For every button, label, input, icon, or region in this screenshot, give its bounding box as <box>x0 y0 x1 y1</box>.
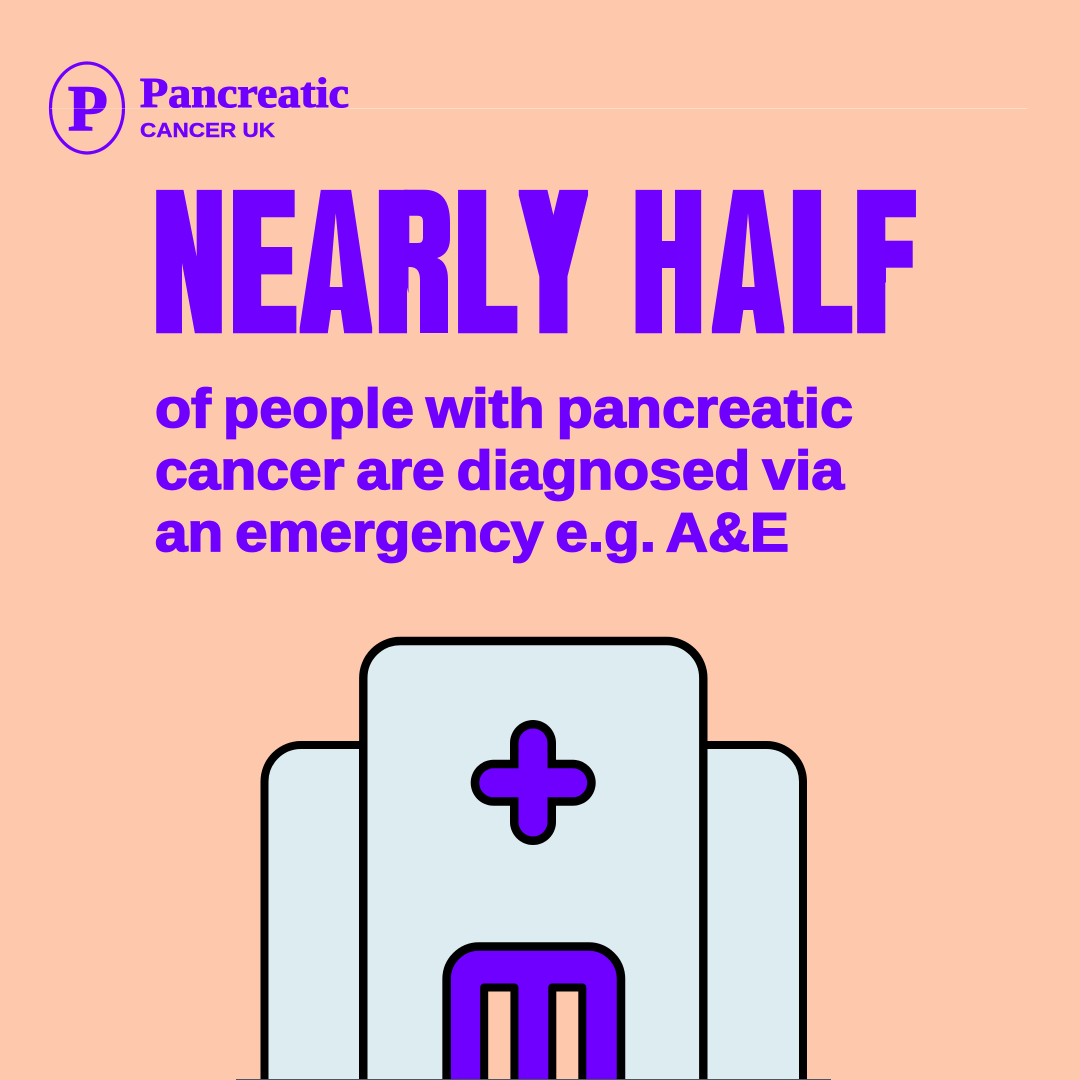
icon: hospital building <box>236 641 831 1080</box>
icon: medical cross <box>494 743 573 822</box>
logo wordmark: Pancreatic: Pancreatic <box>140 71 349 117</box>
logo emblem: P in oval <box>50 63 124 153</box>
hospital right wing <box>703 745 803 1080</box>
subheading text block: an emergency e.g. A&E <box>155 501 789 563</box>
headline: Nearly Half: NEARLY HALF <box>159 148 911 374</box>
subheading text block <box>155 377 853 563</box>
hospital left wing <box>264 745 363 1080</box>
subheading text block: of people with pancreatic <box>155 377 853 439</box>
hospital entrance door <box>447 946 621 1080</box>
hospital main tower <box>363 641 703 1080</box>
logo wordmark: Cancer UK: CANCER UK <box>140 120 276 142</box>
logo emblem: P in oval: P <box>68 73 108 145</box>
logo: Pancreatic Cancer UK <box>50 63 349 153</box>
ground line <box>236 1079 831 1080</box>
subheading text block: cancer are diagnosed via <box>155 439 844 501</box>
